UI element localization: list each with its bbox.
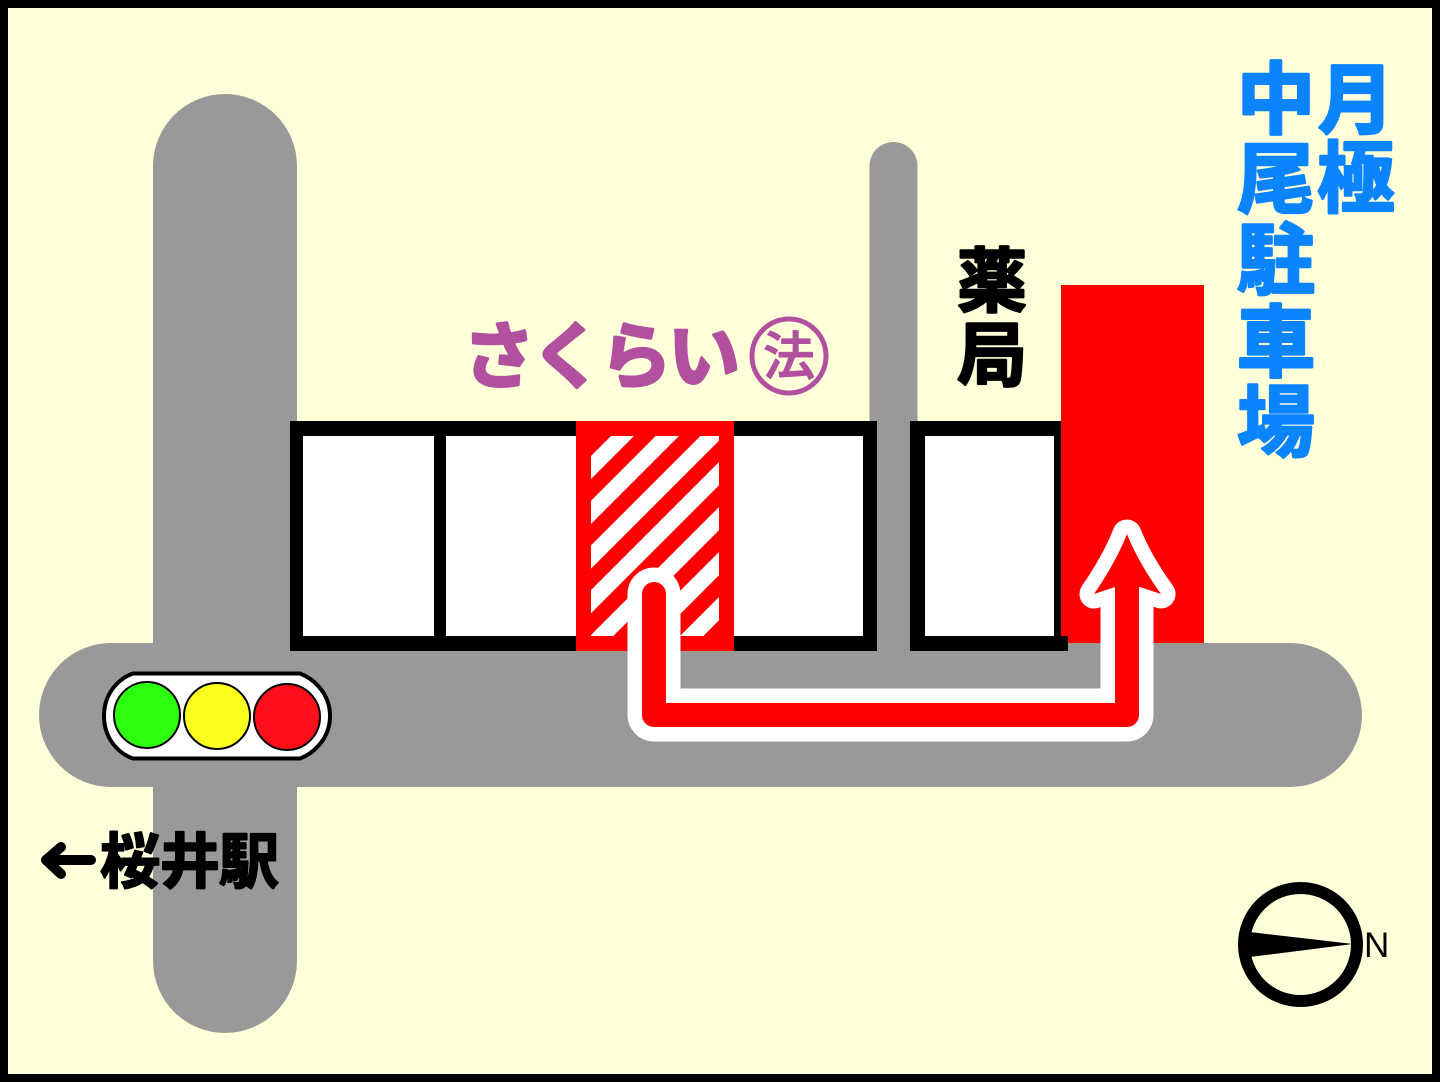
label: Sakurai: く (531, 298, 603, 403)
label: Sakurai: さ (463, 298, 535, 403)
label: Sakurai (463, 298, 826, 403)
label: Tsukigime parking, right column: 月 (1318, 39, 1394, 149)
label: Sakurai: 法 (763, 315, 815, 390)
label: Sakurai: い (668, 298, 740, 403)
parking lot block (1061, 285, 1204, 643)
label: Nakao parking, left column: 尾 (1237, 118, 1315, 230)
label: Nakao parking, left column: 車 (1237, 281, 1315, 393)
label: Sakurai station: 桜 (100, 814, 160, 901)
label: Nakao parking, left column: 駐 (1237, 199, 1315, 311)
label: Tsukigime parking, right column (1317, 39, 1395, 229)
label: Tsukigime parking, right column: 極 (1317, 117, 1395, 229)
pharmacy building (910, 421, 1068, 651)
label: Sakurai: ら (600, 298, 672, 403)
label: pharmacy: 薬 (957, 226, 1027, 327)
icon: arrow toward station (46, 847, 91, 874)
label: Sakurai station: 駅 (219, 814, 279, 901)
label: Sakurai station (100, 814, 279, 901)
road network (111, 166, 1290, 961)
hatched destination shop (576, 421, 734, 651)
label: Sakurai station: 井 (160, 814, 220, 901)
shop row building (290, 421, 877, 651)
route arrow (654, 534, 1161, 715)
compass (1244, 888, 1389, 1001)
traffic light (104, 674, 330, 758)
label: pharmacy: 局 (957, 300, 1027, 401)
label: Nakao parking, left column: 場 (1237, 361, 1315, 473)
label: Nakao parking, left column: 中 (1237, 38, 1315, 150)
label: pharmacy (957, 226, 1027, 401)
compass: N (1364, 926, 1389, 965)
label: Nakao parking, left column (1237, 38, 1315, 473)
